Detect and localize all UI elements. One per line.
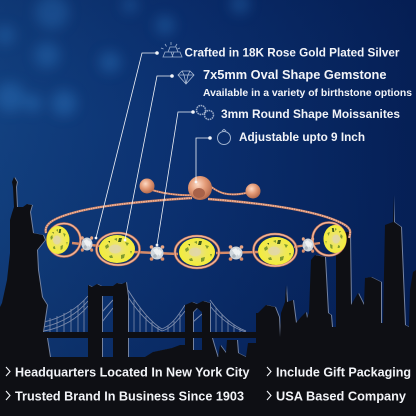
callout: gemstone: Available in a variety of birthstone options: [203, 88, 412, 99]
gemstones: [46, 222, 347, 268]
callout: rose gold: Crafted in 18K Rose Gold Plated Silver: [184, 46, 400, 60]
icon: gold bars: [161, 42, 182, 57]
bridge cables: [44, 290, 246, 332]
callout: moissanites: 3mm Round Shape Moissanites: [221, 107, 400, 121]
feature: gift packaging: Include Gift Packaging: [276, 366, 411, 380]
moissanite stones: [81, 236, 314, 261]
slider and end balls: [140, 176, 260, 200]
chain: [46, 186, 350, 238]
icon: diamond: [178, 71, 194, 84]
callout: gemstone: 7x5mm Oval Shape Gemstone: [203, 67, 386, 82]
feature: headquarters: Headquarters Located In New York City: [15, 366, 250, 380]
footer features: [6, 366, 411, 404]
icon: adjustable ring: [218, 129, 230, 144]
link connectors: [72, 243, 320, 254]
leader lines: [95, 51, 212, 246]
feature: usa based: USA Based Company: [276, 390, 406, 404]
callout: adjustable: Adjustable upto 9 Inch: [239, 130, 365, 144]
bracelet: [46, 176, 350, 268]
city skyline silhouette: [0, 177, 416, 416]
icon: moissanite rings: [196, 106, 214, 120]
feature: trusted brand: Trusted Brand In Business Since 1903: [15, 390, 244, 404]
callout: gemstone: [203, 67, 412, 99]
chevrons: [6, 367, 271, 400]
